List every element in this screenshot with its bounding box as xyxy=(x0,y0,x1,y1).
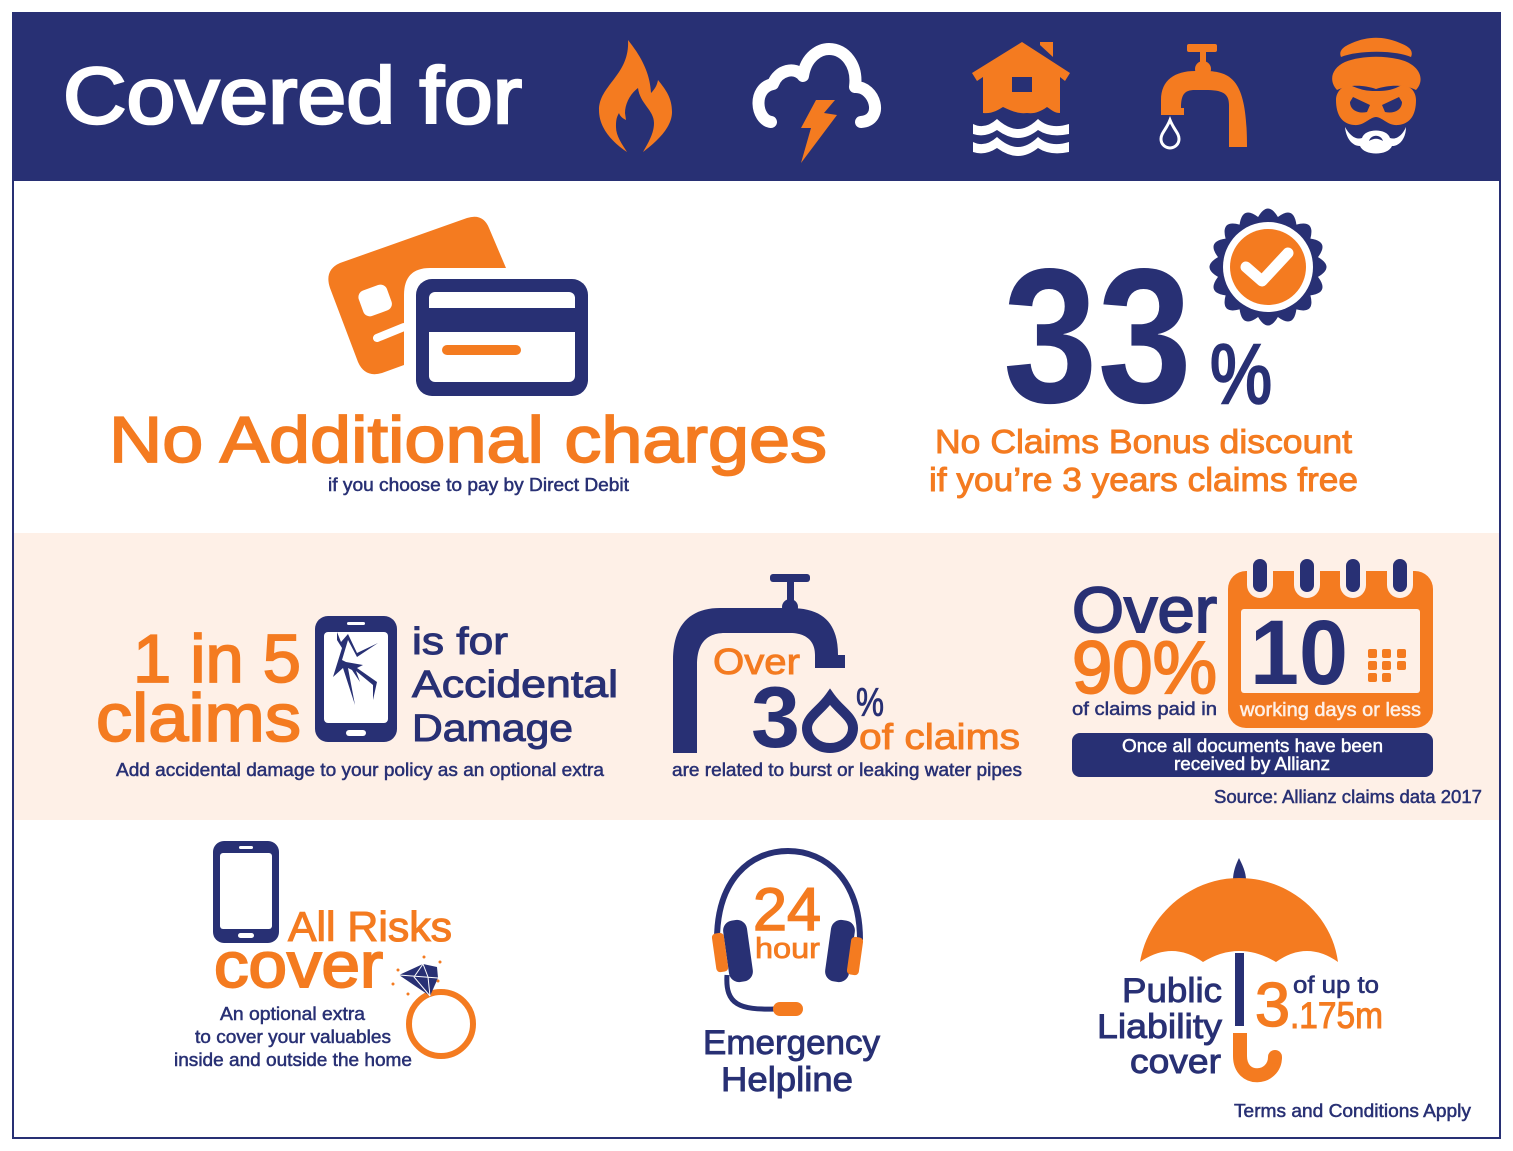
statistic: over 90 percent: 90% xyxy=(1072,626,1217,709)
text: is for accidental damage: Accidental xyxy=(412,664,618,706)
icon: calendar xyxy=(1228,559,1433,728)
note bar xyxy=(1072,733,1433,777)
statistic: 1 in 5 claims: claims xyxy=(96,680,301,756)
caption: are related to burst or leaking water pipes xyxy=(672,760,1022,780)
text: is for accidental damage xyxy=(412,621,618,750)
text: public liability cover: Liability xyxy=(1097,1008,1222,1046)
description xyxy=(174,1004,412,1070)
statistic: 3.175m xyxy=(1255,971,1383,1040)
panel: public liability xyxy=(1097,858,1471,1121)
text: of claims: of claims xyxy=(859,716,1020,757)
statistic: 30 percent: 3 xyxy=(751,670,800,766)
icon: umbrella xyxy=(1140,858,1338,1075)
source: Source: Allianz claims data 2017 xyxy=(1214,787,1482,807)
text: public liability cover xyxy=(1097,972,1222,1081)
icon: calendar: 10 xyxy=(1250,602,1348,704)
heading: cover xyxy=(214,929,383,1001)
icon: phone xyxy=(213,841,279,943)
icon: cracked phone xyxy=(315,616,397,742)
description: An optional extra xyxy=(220,1004,366,1024)
statistic: 33 percent: 33 xyxy=(1003,228,1192,443)
panel: all risks cover xyxy=(174,841,473,1070)
icon: payment cards xyxy=(328,217,588,396)
icon: fire xyxy=(599,40,672,152)
panel: no claims bonus xyxy=(929,208,1358,498)
heading xyxy=(703,1024,880,1099)
icon: burglar xyxy=(1332,38,1421,154)
statistic: 30 percent xyxy=(751,670,884,766)
text: public liability cover: cover xyxy=(1130,1043,1221,1081)
heading: No Additional charges xyxy=(109,403,827,476)
description: inside and outside the home xyxy=(174,1050,412,1070)
statistic: 3.175m: 3 xyxy=(1255,971,1290,1040)
statistic: over 90 percent: of claims paid in xyxy=(1072,699,1217,719)
heading: Emergency xyxy=(703,1024,880,1062)
caption: Add accidental damage to your policy as an optional extra xyxy=(116,760,605,780)
note bar: Once all documents have been xyxy=(1122,736,1383,756)
icon: diamond ring xyxy=(392,956,473,1056)
text: 24 hour: 24 xyxy=(753,876,821,943)
title: Covered for xyxy=(63,51,522,140)
icon: headset xyxy=(711,851,864,1016)
panel: emergency helpline xyxy=(703,851,880,1099)
subtext: if you choose to pay by Direct Debit xyxy=(328,475,629,495)
icon: storm cloud xyxy=(758,49,875,163)
heading: All Risks xyxy=(288,903,452,950)
icon: large tap xyxy=(673,574,845,753)
statistic: 30 percent: % xyxy=(856,681,884,725)
text: public liability cover: Public xyxy=(1122,972,1222,1010)
panel: claims paid xyxy=(1072,559,1482,807)
statistic: over 90 percent xyxy=(1072,574,1217,719)
statistic: 33 percent: % xyxy=(1210,327,1272,421)
statistic: 1 in 5 claims xyxy=(96,621,301,756)
statistic: over 90 percent: Over xyxy=(1072,574,1217,646)
statistic: 3.175m: .175m xyxy=(1290,995,1383,1036)
text: over: Over xyxy=(713,641,800,682)
heading xyxy=(214,903,452,1001)
heading: Helpline xyxy=(721,1061,853,1099)
panel: no additional charges xyxy=(109,217,827,495)
panel: no claims bonus: if you’re 3 years claims free xyxy=(929,461,1358,498)
description: to cover your valuables xyxy=(195,1027,391,1047)
panel: accidental damage xyxy=(96,616,618,780)
text: is for accidental damage: Damage xyxy=(412,708,573,750)
header banner xyxy=(12,12,1501,181)
icon: check badge xyxy=(1210,208,1326,326)
caption: No Claims Bonus discount xyxy=(935,423,1352,460)
icon: calendar: working days or less xyxy=(1239,700,1421,721)
icon: leaking tap xyxy=(1161,44,1247,148)
terms: Terms and Conditions Apply xyxy=(1234,1101,1471,1121)
icon: flooded house xyxy=(972,42,1070,156)
text: 24 hour: hour xyxy=(755,933,820,965)
statistic: 3.175m: of up to xyxy=(1293,972,1379,999)
text: is for accidental damage: is for xyxy=(412,621,508,663)
panel: burst pipes xyxy=(672,574,1022,780)
statistic: 1 in 5 claims: 1 in 5 xyxy=(133,621,301,697)
note bar: received by Allianz xyxy=(1174,754,1330,774)
